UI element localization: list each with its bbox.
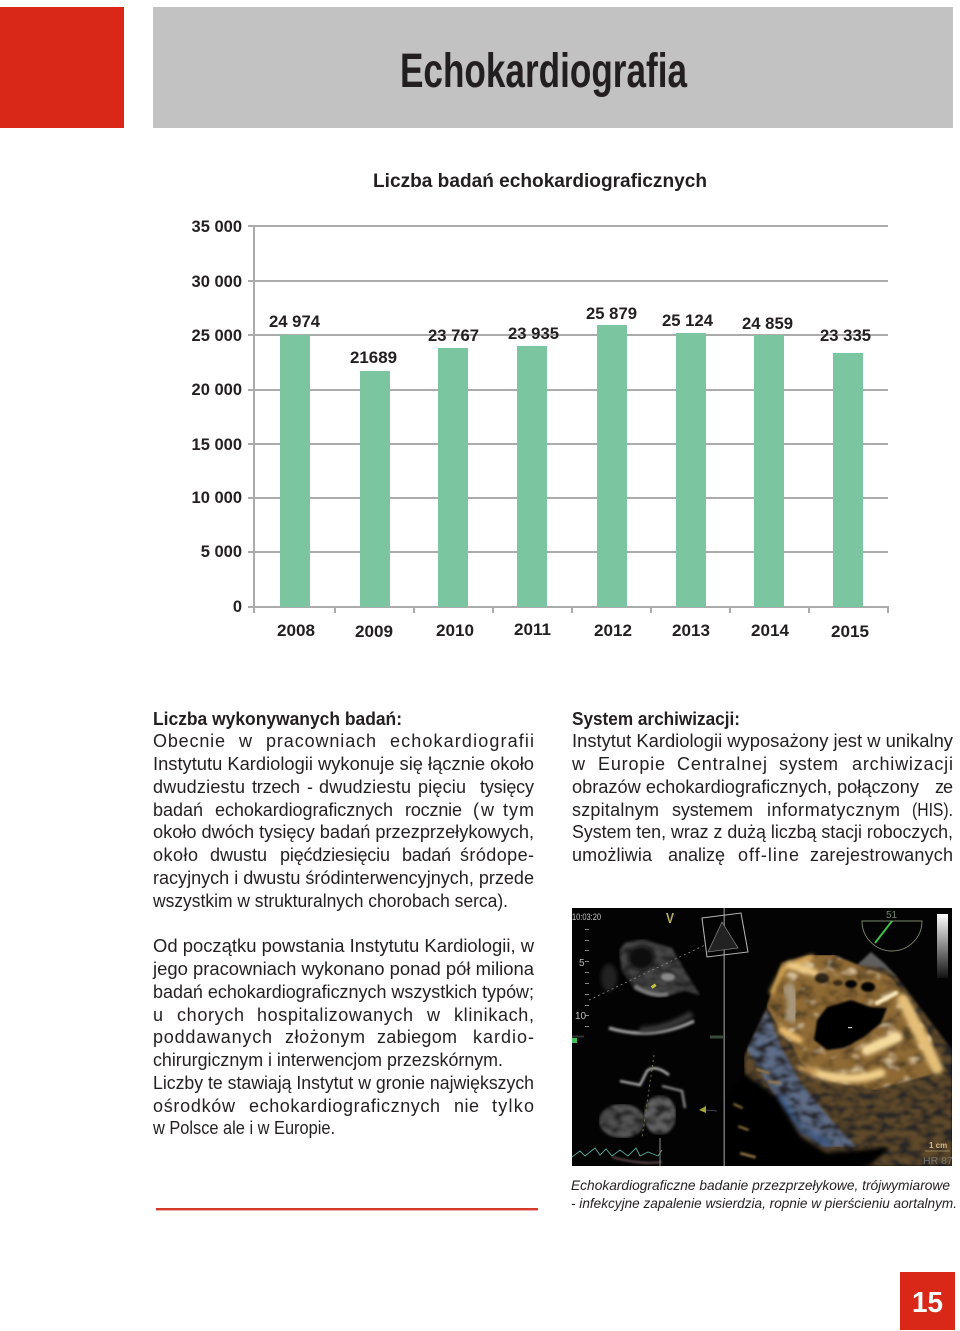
text block: liczba wykonywanych badan: echokardiografii xyxy=(390,731,534,751)
text block: liczba wykonywanych badan: tym xyxy=(503,800,534,820)
3D view xyxy=(724,952,952,1166)
text block: liczba wykonywanych badan: dwudziestu xyxy=(319,777,411,797)
text block: od poczatku powstania: poddawanych xyxy=(153,1027,272,1047)
y axis labels: 35 000 xyxy=(192,218,242,236)
text block: liczba wykonywanych badan xyxy=(152,709,534,911)
value labels: 23 935 xyxy=(508,325,559,343)
text block: liczba wykonywanych badan: - xyxy=(307,777,313,797)
text block: system archiwizacji: szpitalnym xyxy=(572,800,659,820)
year labels: 2014 xyxy=(751,622,790,640)
text block: od poczatku powstania: ośrodków xyxy=(153,1096,236,1116)
text block: liczba wykonywanych badan: badań xyxy=(153,800,203,820)
text block: system archiwizacji: Instytut Kardiologii wyposażony jest w unikalny xyxy=(572,731,953,751)
year labels: 2013 xyxy=(672,622,710,640)
image caption: Echokardiograficzne badanie przezprzełykowe, trójwymiarowe xyxy=(571,1177,950,1193)
text block: od poczatku powstania: badań echokardiograficznych wszystkich typów; xyxy=(153,982,534,1002)
text block: system archiwizacji: analizę xyxy=(668,845,725,865)
text block: liczba wykonywanych badan: śródope- xyxy=(460,845,534,865)
image caption xyxy=(571,1177,957,1211)
grey title banner xyxy=(153,7,953,128)
year labels: 2008 xyxy=(277,622,315,640)
divider lines and icons: 1 cm xyxy=(929,1141,947,1150)
text block: liczba wykonywanych badan: dwudziestu xyxy=(153,777,245,797)
page number badge xyxy=(900,1272,955,1330)
text block: system archiwizacji: system xyxy=(779,754,838,774)
text block: system archiwizacji: umożliwia xyxy=(572,845,653,865)
page number badge: 15 xyxy=(912,1287,943,1319)
text block: od poczatku powstania: nie xyxy=(454,1096,479,1116)
year labels: 2009 xyxy=(355,623,393,641)
text block: liczba wykonywanych badan: echokardiograficznych xyxy=(215,800,393,820)
text block: liczba wykonywanych badan: Liczba wykonywanych badań: xyxy=(153,709,402,729)
text block: od poczatku powstania: u xyxy=(153,1005,163,1025)
text block: system archiwizacji: informatycznym xyxy=(767,800,900,820)
value labels: 25 124 xyxy=(662,312,714,330)
value labels: 24 859 xyxy=(742,315,793,333)
y axis labels: 30 000 xyxy=(192,273,242,291)
value labels: 21689 xyxy=(350,349,397,367)
year labels: 2012 xyxy=(594,622,632,640)
text block: system archiwizacji: systemem xyxy=(672,800,753,820)
y axis labels: 20 000 xyxy=(192,381,242,399)
y axis labels: 5 000 xyxy=(201,543,242,561)
y axis labels xyxy=(192,218,242,616)
text block: liczba wykonywanych badan: Obecnie xyxy=(153,731,225,751)
year labels: 2011 xyxy=(514,621,551,639)
divider lines and icons: 5 xyxy=(579,958,585,969)
divider lines and icons: V xyxy=(666,910,674,927)
image caption: - infekcyjne zapalenie wsierdzia, ropnie w pierścieniu aortalnym. xyxy=(571,1195,957,1211)
text block: system archiwizacji: (HIS). xyxy=(912,800,953,820)
value labels: 25 879 xyxy=(586,305,637,323)
title: Echokardiografia xyxy=(400,45,687,98)
text block: system archiwizacji: zarejestrowanych xyxy=(810,845,953,865)
text block: system archiwizacji: Centralnej xyxy=(677,754,767,774)
text block: od poczatku powstania: Od początku powstania Instytutu Kardiologii, w xyxy=(153,936,535,956)
y axis labels: 10 000 xyxy=(192,489,242,507)
text block: system archiwizacji: System ten, wraz z dużą liczbą stacji roboczych, xyxy=(572,822,953,842)
text block: od poczatku powstania: klinikach, xyxy=(454,1005,534,1025)
divider lines and icons: HR 87 xyxy=(923,1155,953,1167)
value labels xyxy=(269,305,871,367)
text block: system archiwizacji: ze xyxy=(935,777,953,797)
text block: od poczatku powstania: złożonym xyxy=(285,1027,365,1047)
text block: liczba wykonywanych badan: około xyxy=(153,845,198,865)
text block: od poczatku powstania: w Polsce ale i w Europie. xyxy=(152,1118,335,1138)
text block: liczba wykonywanych badan: około dwóch tysięcy badań przezprzełykowych, xyxy=(153,822,534,842)
text block: liczba wykonywanych badan: wszystkim w strukturalnych chorobach serca). xyxy=(152,891,508,911)
lower 2D sector xyxy=(572,1055,717,1166)
text block: od poczatku powstania: echokardiograficznych xyxy=(249,1096,440,1116)
text block: system archiwizacji: w xyxy=(571,754,586,774)
value labels: 23 335 xyxy=(820,327,871,345)
text block: od poczatku powstania: jego pracowniach wykonano ponad pół miliona xyxy=(152,959,535,979)
y axis labels: 15 000 xyxy=(192,436,242,454)
cavity xyxy=(814,1000,887,1050)
red divider xyxy=(156,1208,538,1210)
text block: liczba wykonywanych badan: pięciu xyxy=(418,777,466,797)
text block: od poczatku powstania xyxy=(152,936,535,1138)
text block: od poczatku powstania: zabiegom xyxy=(377,1027,457,1047)
bars xyxy=(280,325,863,607)
text block: system archiwizacji: Europie xyxy=(598,754,665,774)
text block: system archiwizacji: off-line xyxy=(738,845,799,865)
text block: od poczatku powstania: hospitalizowanych xyxy=(257,1005,413,1025)
year labels: 2010 xyxy=(436,622,474,640)
text block: liczba wykonywanych badan: w xyxy=(238,731,253,751)
divider lines and icons: 10 xyxy=(575,1011,587,1022)
echocardiography image xyxy=(572,908,953,1167)
text block: system archiwizacji: System archiwizacji: xyxy=(572,709,740,729)
text block: liczba wykonywanych badan: Instytutu Kardiologii wykonuje się łącznie około xyxy=(153,754,534,774)
upper 2D sector xyxy=(589,939,705,1033)
text block: od poczatku powstania: chirurgicznym i interwencjom przezskórnym. xyxy=(153,1050,503,1070)
value labels: 23 767 xyxy=(428,327,479,345)
text block: liczba wykonywanych badan: dwustu xyxy=(210,845,267,865)
divider lines and icons xyxy=(572,908,953,1167)
text block: liczba wykonywanych badan: rocznie xyxy=(405,800,462,820)
text block: liczba wykonywanych badan: racyjnych i dwustu śródinterwencyjnych, przede xyxy=(153,868,534,888)
text block: liczba wykonywanych badan: tysięcy xyxy=(480,777,534,797)
red header block xyxy=(0,7,124,128)
text block: system archiwizacji: archiwizacji xyxy=(852,754,953,774)
divider lines and icons: 51 xyxy=(886,910,898,921)
y axis labels: 0 xyxy=(233,598,242,616)
text block: system archiwizacji: obrazów echokardiograficznych, połączony xyxy=(572,777,919,797)
chart title: Liczba badań echokardiograficznych xyxy=(373,171,707,192)
text block: od poczatku powstania: w xyxy=(426,1005,441,1025)
text block: liczba wykonywanych badan: trzech xyxy=(252,777,300,797)
text block: liczba wykonywanych badan: (w xyxy=(473,800,495,820)
year labels xyxy=(277,621,869,641)
y axis labels: 25 000 xyxy=(192,327,242,345)
value labels: 24 974 xyxy=(269,313,321,331)
year labels: 2015 xyxy=(831,623,869,641)
text block: od poczatku powstania: kardio- xyxy=(473,1027,534,1047)
text block: liczba wykonywanych badan: badań xyxy=(402,845,451,865)
divider lines and icons: 10:03:20 xyxy=(572,912,601,922)
text block: liczba wykonywanych badan: pięćdziesięciu xyxy=(280,845,390,865)
text block: od poczatku powstania: Liczby te stawiają Instytut w gronie największych xyxy=(153,1073,534,1093)
text block: system archiwizacji xyxy=(571,709,953,865)
text block: od poczatku powstania: chorych xyxy=(177,1005,244,1025)
text block: liczba wykonywanych badan: pracowniach xyxy=(266,731,376,751)
bar chart xyxy=(192,218,889,641)
text block: od poczatku powstania: tylko xyxy=(492,1096,534,1116)
